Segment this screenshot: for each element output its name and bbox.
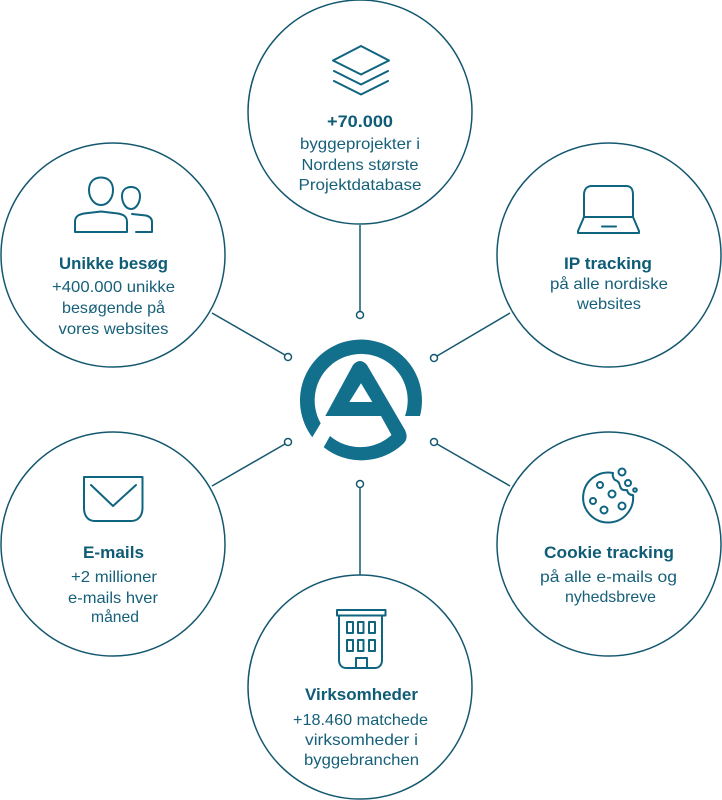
heading: e-mails: E-mails (83, 543, 144, 562)
text: unikke besøg (52, 279, 175, 338)
text: virksomheder (293, 712, 428, 769)
icon: building (337, 610, 386, 668)
icon: people (75, 178, 152, 232)
icon: envelope (84, 477, 142, 521)
connector: lower left (212, 438, 292, 486)
icon: cookie (583, 468, 637, 523)
text: virksomheder: virksomheder i (305, 732, 418, 749)
text: e-mails: +2 millioner (71, 569, 158, 586)
text: e-mails (68, 569, 159, 626)
text: unikke besøg: +400.000 unikke (52, 279, 175, 296)
connector: top (356, 225, 364, 318)
panel: e-mails (1, 432, 225, 656)
heading: unikke besøg: Unikke besøg (59, 254, 168, 273)
panel: ip tracking (497, 143, 721, 367)
heading: +70.000: +70.000 (327, 112, 393, 131)
text: cookie tracking: på alle e-mails og (540, 568, 677, 586)
heading: cookie tracking: Cookie tracking (544, 543, 674, 562)
text: e-mails: e-mails hver (68, 590, 159, 607)
text: ip tracking: på alle nordiske (550, 275, 668, 293)
text: ip tracking: websites (576, 296, 641, 313)
text: unikke besøg: vores websites (58, 321, 168, 338)
text: e-mails: måned (91, 608, 139, 626)
icon: laptop (578, 186, 639, 233)
connector: upper left (212, 313, 292, 360)
text: projektdatabase: Projektdatabase (298, 177, 422, 194)
icon: layers (333, 46, 389, 94)
heading: ip tracking: IP tracking (564, 254, 652, 273)
text: ip tracking (550, 275, 668, 313)
text: projektdatabase (298, 136, 422, 194)
panel: projektdatabase (248, 0, 472, 224)
panel: cookie tracking (497, 432, 721, 656)
text: projektdatabase: byggeprojekter i (300, 136, 420, 153)
text: unikke besøg: besøgende på (62, 299, 165, 317)
text: projektdatabase: Nordens største (302, 157, 419, 174)
text: virksomheder: byggebranchen (304, 752, 419, 769)
connector: bottom (356, 480, 364, 575)
panel: virksomheder (248, 575, 472, 799)
text: cookie tracking (540, 568, 677, 606)
heading: virksomheder: Virksomheder (305, 685, 418, 704)
connector: upper right (430, 313, 510, 362)
text: virksomheder: +18.460 matchede (293, 712, 428, 729)
text: cookie tracking: nyhedsbreve (565, 589, 656, 606)
panel: unikke besøg (1, 143, 225, 367)
connector: lower right (430, 438, 510, 486)
logo (300, 340, 422, 460)
